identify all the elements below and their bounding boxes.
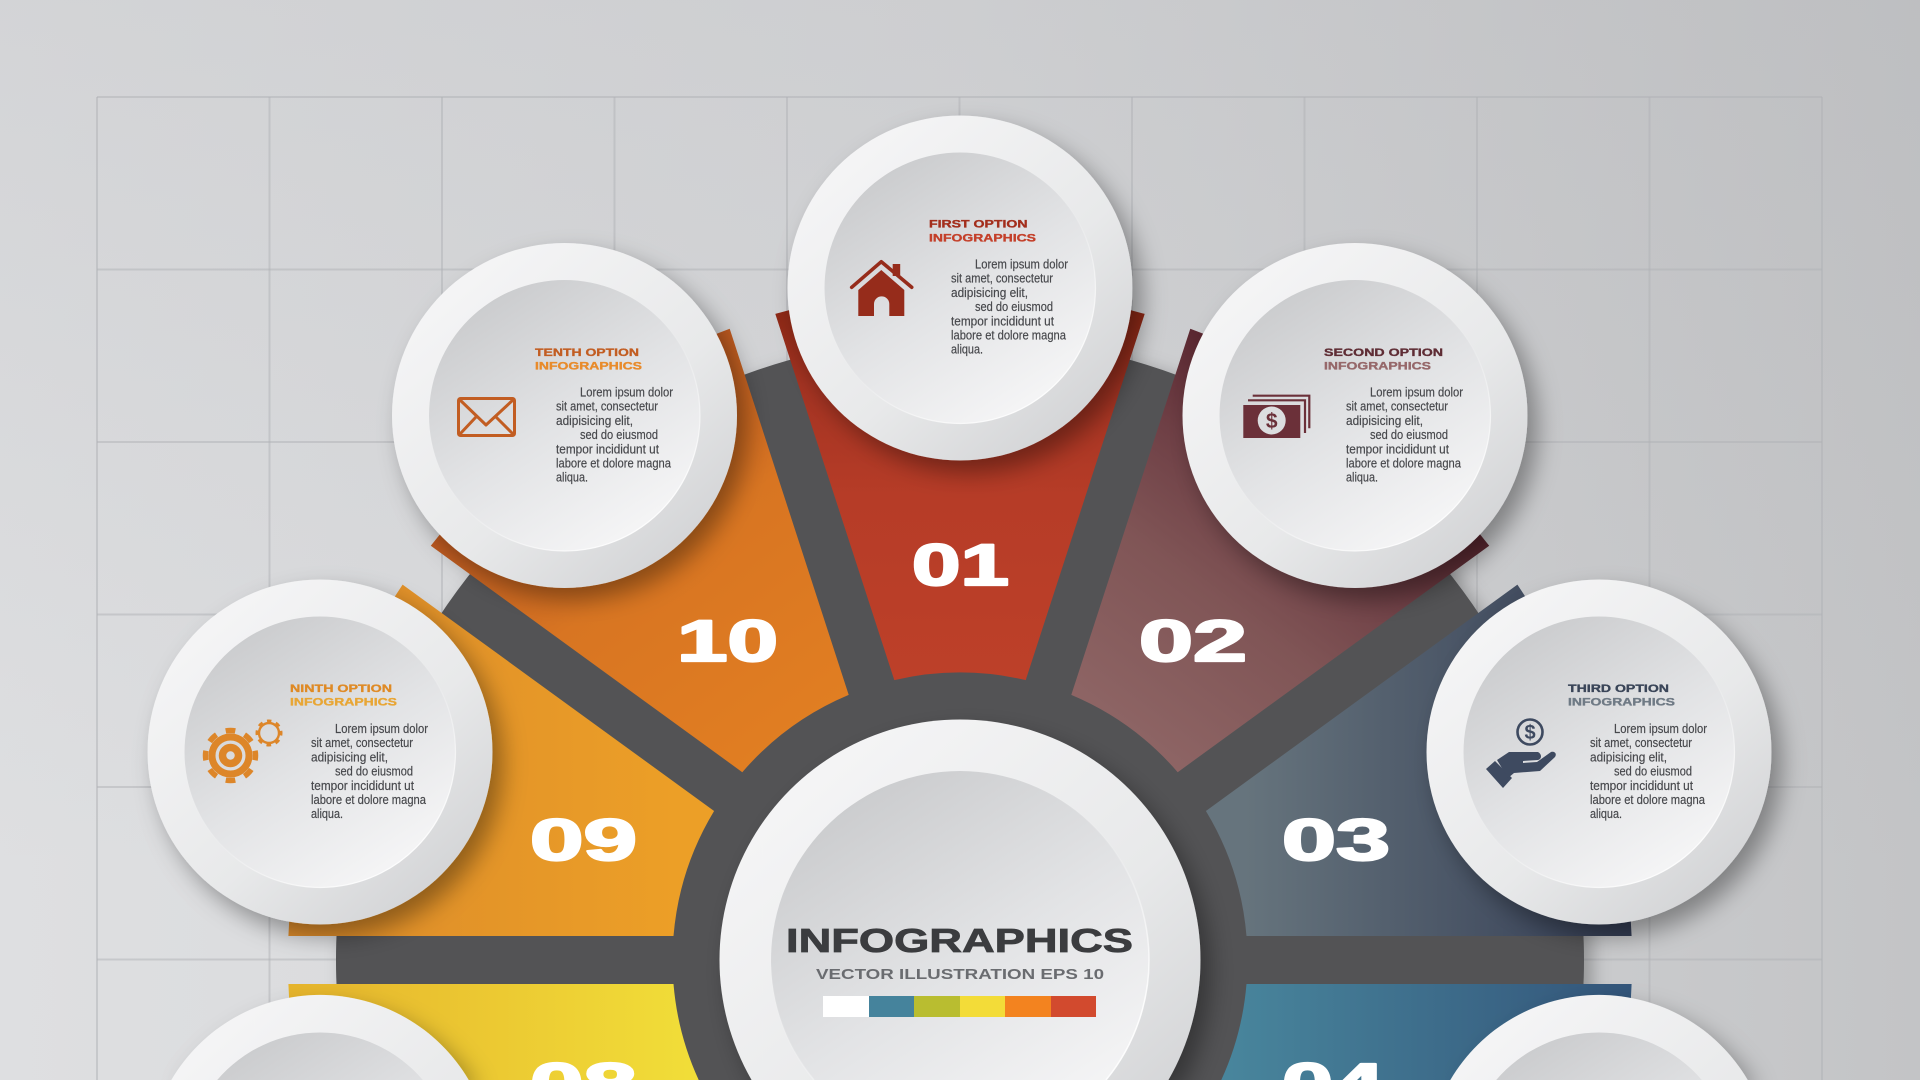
- heading: INFOGRAPHICS: [929, 232, 1036, 244]
- segment 02: [1071, 329, 1489, 772]
- centre title: INFOGRAPHICS: [786, 922, 1133, 959]
- icon: envelope: [458, 398, 514, 436]
- disc 03: [1426, 580, 1772, 924]
- disc 01: [788, 116, 1132, 460]
- body text: aliqua.: [1590, 806, 1622, 821]
- body text: tempor incididunt ut: [311, 778, 414, 793]
- number 01: 01: [912, 533, 1009, 598]
- body text: Lorem ipsum dolor: [580, 384, 674, 400]
- body text: sed do eiusmod: [580, 427, 658, 442]
- heading: [535, 347, 642, 372]
- body text: aliqua.: [556, 470, 588, 485]
- body text: adipisicing elit,: [556, 413, 633, 428]
- body text: sit amet, consectetur: [1590, 735, 1693, 750]
- segment 03: [1206, 585, 1632, 936]
- body text: Lorem ipsum dolor: [1370, 384, 1464, 400]
- icon: banknotes: $: [1266, 410, 1278, 433]
- body text: sit amet, consectetur: [556, 399, 659, 414]
- body text: [311, 721, 429, 821]
- disc 08 (cropped): [171, 995, 469, 1080]
- body text: sed do eiusmod: [1370, 427, 1448, 442]
- number 09: 09: [530, 808, 637, 873]
- number 02: 02: [1139, 609, 1247, 674]
- number 03: 03: [1282, 808, 1390, 873]
- icon: house: [852, 262, 912, 316]
- body text: tempor incididunt ut: [1346, 441, 1449, 456]
- body text: aliqua.: [951, 342, 983, 357]
- segment 09: [288, 585, 714, 936]
- body text: sed do eiusmod: [975, 299, 1053, 314]
- heading: [1324, 347, 1443, 372]
- heading: [290, 683, 397, 708]
- heading: INFOGRAPHICS: [1324, 360, 1431, 372]
- body text: labore et dolore magna: [1346, 456, 1462, 470]
- heading: [929, 218, 1036, 244]
- body text: [556, 384, 674, 485]
- segment 04: [1221, 984, 1632, 1080]
- body text: sed do eiusmod: [335, 764, 413, 779]
- heading: [1568, 683, 1675, 708]
- body text: sit amet, consectetur: [951, 271, 1054, 286]
- body text: labore et dolore magna: [951, 328, 1067, 342]
- icon: gears: [206, 721, 281, 780]
- body text: tempor incididunt ut: [556, 441, 659, 456]
- disc 04 (cropped): [1450, 995, 1748, 1080]
- segment 08: [288, 984, 699, 1080]
- body text: Lorem ipsum dolor: [335, 721, 429, 736]
- body text: tempor incididunt ut: [1590, 778, 1693, 793]
- body text: adipisicing elit,: [951, 285, 1028, 300]
- body text: tempor incididunt ut: [951, 313, 1054, 328]
- body text: [951, 256, 1069, 357]
- numbers 04 and 08 cropped by the frame: [530, 1052, 1384, 1080]
- disc 02: [1182, 243, 1528, 588]
- body text: adipisicing elit,: [1590, 749, 1667, 764]
- heading: FIRST OPTION: [929, 218, 1028, 230]
- body text: [1590, 721, 1708, 821]
- disc 09: [148, 580, 492, 924]
- body text: aliqua.: [1346, 470, 1378, 485]
- body text: labore et dolore magna: [556, 456, 672, 470]
- icon: hand with coin: $: [1524, 722, 1536, 744]
- body text: sit amet, consectetur: [311, 735, 414, 750]
- icon: banknotes: [1243, 396, 1309, 438]
- heading: TENTH OPTION: [535, 347, 639, 359]
- body text: [1346, 384, 1464, 485]
- body text: adipisicing elit,: [1346, 413, 1423, 428]
- body text: sit amet, consectetur: [1346, 399, 1449, 414]
- number 10: 10: [677, 609, 778, 674]
- heading: NINTH OPTION: [290, 683, 392, 695]
- body text: Lorem ipsum dolor: [975, 256, 1069, 272]
- colour bar: [823, 996, 1096, 1017]
- segment 10: [431, 329, 849, 772]
- body text: adipisicing elit,: [311, 749, 388, 764]
- centre subtitle: VECTOR ILLUSTRATION EPS 10: [816, 966, 1104, 983]
- icon: hand with coin: [1486, 720, 1556, 788]
- centre disc: [720, 719, 1201, 1080]
- disc 10: [392, 243, 737, 588]
- body text: labore et dolore magna: [1590, 792, 1706, 807]
- heading: SECOND OPTION: [1324, 347, 1443, 359]
- body text: aliqua.: [311, 806, 343, 821]
- heading: INFOGRAPHICS: [290, 696, 397, 708]
- body text: labore et dolore magna: [311, 792, 427, 807]
- heading: THIRD OPTION: [1568, 683, 1669, 695]
- body text: sed do eiusmod: [1614, 764, 1692, 779]
- dark hub fan: [336, 336, 1584, 1080]
- segments: [288, 288, 1632, 1080]
- heading: INFOGRAPHICS: [1568, 696, 1675, 708]
- heading: INFOGRAPHICS: [535, 360, 642, 372]
- segment numbers: [530, 533, 1390, 1080]
- body text: Lorem ipsum dolor: [1614, 721, 1708, 736]
- segment 01: [775, 288, 1145, 680]
